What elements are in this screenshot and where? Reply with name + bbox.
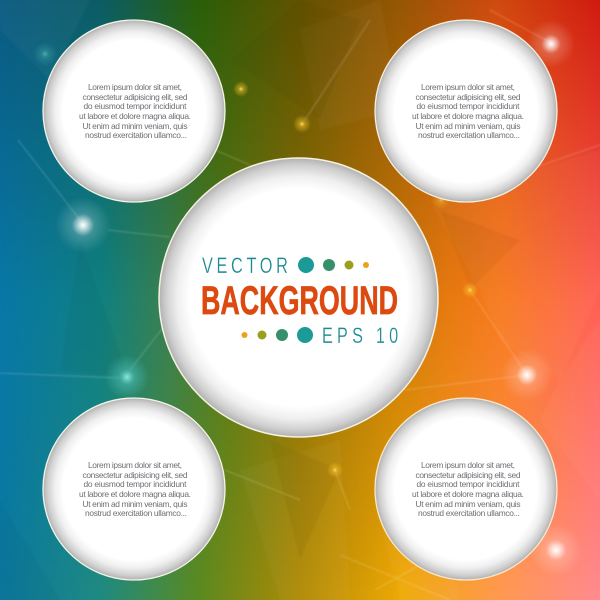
heading: BACKGROUND: BACKGROUND: [201, 279, 398, 323]
text block: bottom-left: consectetur adipisicing elit, sed: [82, 470, 188, 480]
text block: top-left: consectetur adipisicing elit, sed: [82, 92, 188, 102]
text block: bottom-left: Lorem ipsum dolor sit amet,: [88, 460, 182, 470]
text block: top-right: Lorem ipsum dolor sit amet,: [421, 82, 515, 92]
text block: top-right: do eiusmod tempor incididunt: [416, 101, 520, 111]
text block: top-left: Lorem ipsum dolor sit amet,: [88, 82, 182, 92]
panel: top-left circle: [43, 20, 225, 202]
text block: bottom-right: ut labore et dolore magna aliqua.: [412, 489, 524, 499]
text block: bottom-right: consectetur adipisicing elit, sed: [416, 470, 521, 480]
text block: bottom-left: do eiusmod tempor incididunt: [84, 479, 187, 489]
text block: bottom-right: Ut enim ad minim veniam, quis: [416, 499, 520, 509]
text block: top-left: ut labore et dolore magna aliqua.: [79, 111, 191, 121]
panel: central circle: [159, 158, 438, 437]
text block: top-left: Ut enim ad minim veniam, quis: [82, 121, 188, 131]
dots: bottom row: [242, 327, 313, 343]
heading: EPS 10: EPS 10: [322, 324, 398, 349]
panel: bottom-left circle: [43, 398, 225, 580]
text block: top-left: nostrud exercitation ullamco...: [85, 130, 187, 140]
text block: top-right: ut labore et dolore magna aliqua.: [412, 111, 524, 121]
text block: bottom-left: Ut enim ad minim veniam, quis: [82, 499, 188, 509]
text block: bottom-left: nostrud exercitation ullamco...: [85, 508, 187, 518]
text block: bottom-right: Lorem ipsum dolor sit amet,: [421, 460, 515, 470]
text block: top-left: [79, 82, 191, 140]
heading: VECTOR: VECTOR: [202, 254, 288, 279]
text block: bottom-right: [412, 460, 524, 518]
text block: top-left: do eiusmod tempor incididunt: [84, 101, 187, 111]
text block: top-right: consectetur adipisicing elit, sed: [416, 92, 521, 102]
text block: bottom-right: nostrud exercitation ullamco...: [418, 508, 520, 518]
text block: top-right: [412, 82, 524, 140]
panel: bottom-right circle: [375, 398, 557, 580]
text block: top-right: nostrud exercitation ullamco...: [418, 130, 520, 140]
text block: top-right: Ut enim ad minim veniam, quis: [416, 121, 520, 131]
text block: bottom-left: [79, 460, 191, 518]
dots: top row: [298, 257, 369, 273]
text block: bottom-right: do eiusmod tempor incididunt: [416, 479, 520, 489]
text block: bottom-left: ut labore et dolore magna aliqua.: [79, 489, 191, 499]
panel: top-right circle: [375, 20, 557, 202]
